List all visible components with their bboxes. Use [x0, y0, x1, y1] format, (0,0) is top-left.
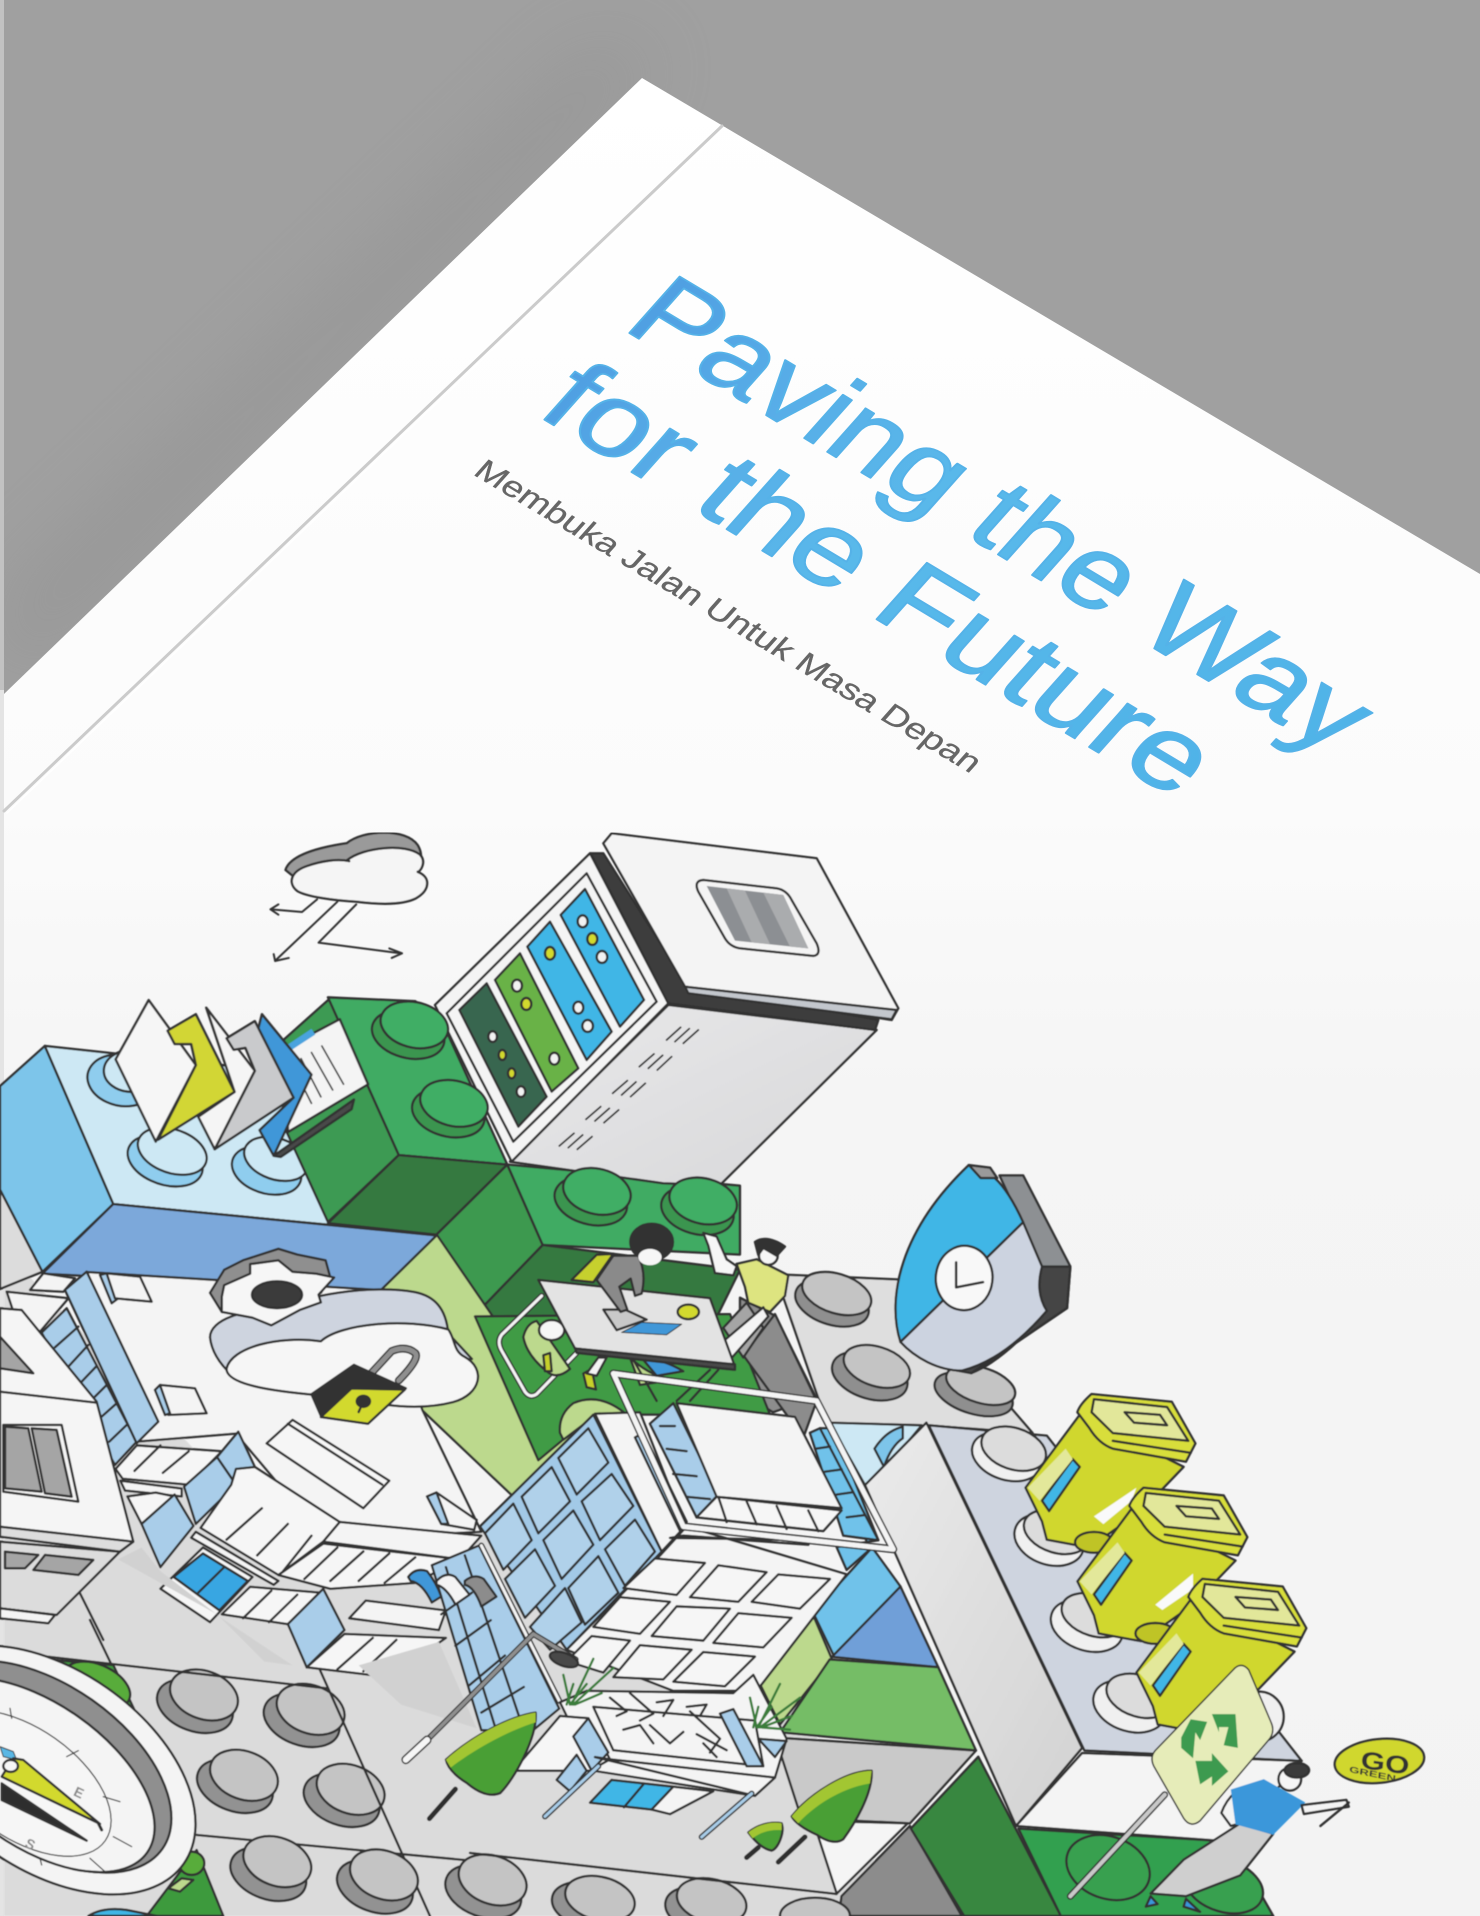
go green sign text: GREEN [1349, 1764, 1396, 1784]
server tower [435, 833, 898, 1185]
icon: gear [210, 1249, 334, 1325]
white studs on block [967, 1419, 1284, 1742]
table with two people [538, 1224, 788, 1401]
glass office tower [480, 1374, 893, 1691]
icon: file folders [116, 1000, 368, 1157]
street lamp [406, 1634, 581, 1760]
plants on terrace [563, 1659, 800, 1730]
light green column [382, 1235, 598, 1520]
bin 3 [1136, 1579, 1306, 1732]
compass [0, 1594, 241, 1916]
illustration [0, 833, 1426, 1916]
compass: S [23, 1835, 38, 1853]
person holding go green sign [1146, 1735, 1426, 1912]
white rooftop plane [87, 1272, 481, 1540]
grey studs lower row [3, 1620, 534, 1916]
stepped left building [7, 1272, 559, 1730]
ground plane [4, 1250, 900, 1916]
tree right [778, 1771, 872, 1862]
terrace of tower with seating [513, 1675, 787, 1837]
recycling bins [1025, 1394, 1306, 1732]
green studs [362, 993, 746, 1244]
green lego blocks [283, 997, 740, 1335]
flags [408, 1570, 496, 1606]
terrace rows [116, 1420, 481, 1677]
table scene floor [475, 1303, 817, 1460]
glass lower strip [432, 1546, 559, 1730]
go green sign text [1349, 1746, 1411, 1784]
icon: cloud with padlock [210, 1289, 478, 1424]
tree small [747, 1823, 783, 1858]
corner white building [0, 1308, 133, 1640]
bin 2 [1077, 1488, 1247, 1644]
icon: cloud network [270, 833, 427, 961]
tree left [429, 1713, 536, 1819]
subtitle: Membuka Jalan Untuk Masa Depan [467, 453, 989, 779]
title: for the Future [519, 340, 1243, 818]
green studs at base [1060, 1825, 1269, 1916]
grey studs bottom right [470, 1853, 850, 1916]
bin 1 [1025, 1394, 1195, 1553]
compass: E [71, 1783, 87, 1802]
book spine crease [4, 126, 725, 813]
icon: shield with clock [895, 1165, 1070, 1373]
ground shadows [118, 1548, 477, 1728]
grey lego plate [740, 1264, 1033, 1485]
title: Paving the Way [605, 254, 1400, 774]
coloured bands and right block [754, 1423, 1302, 1916]
rounded chair frame [499, 1296, 683, 1396]
recycling sign [1070, 1665, 1273, 1896]
blue glass strips [7, 1272, 207, 1465]
go green sign text: GO [1359, 1746, 1411, 1780]
light blue brick [0, 1045, 437, 1291]
